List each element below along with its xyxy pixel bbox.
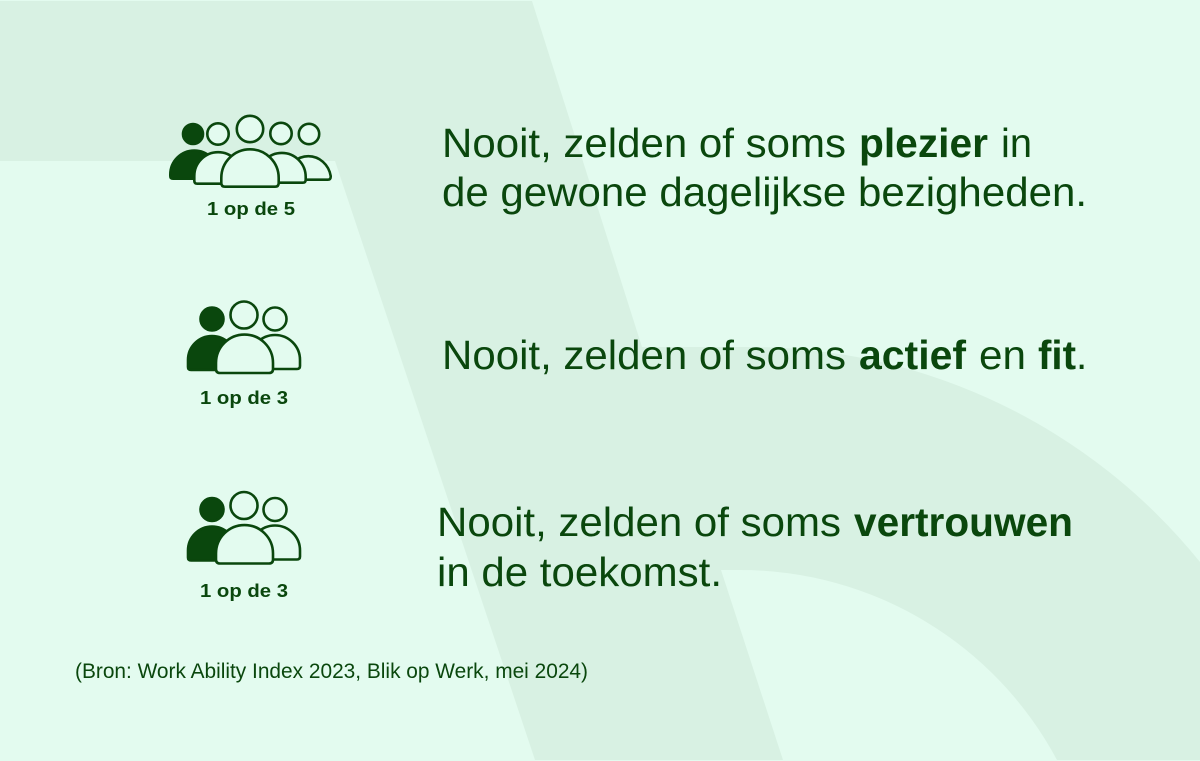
statement: actief en fit: [442, 332, 1087, 378]
statement: plezier: [442, 120, 1087, 215]
icon: group of three people, one highlighted: [188, 492, 300, 564]
icon: group of five people, one highlighted: [170, 116, 331, 187]
label: 1 op de 3: 1 op de 3: [200, 581, 288, 601]
icon: group of three people, one highlighted: [188, 302, 300, 373]
statement: plezier: de gewone dagelijkse bezigheden.: [442, 169, 1087, 215]
source note: (Bron: Work Ability Index 2023, Blik op Werk, mei 2024): [75, 660, 588, 683]
statement: actief en fit: .: [1076, 332, 1087, 378]
row 2: actief en fit: [188, 302, 1087, 408]
statement: plezier: in: [1001, 120, 1032, 166]
statement: actief en fit: actief: [859, 332, 967, 378]
row 3: vertrouwen: [188, 492, 1073, 601]
statement: vertrouwen: [437, 499, 1073, 595]
statement: plezier: Nooit, zelden of soms: [442, 120, 846, 166]
label: 1 op de 3: 1 op de 3: [200, 388, 288, 408]
statement: vertrouwen: vertrouwen: [854, 499, 1073, 545]
statement: vertrouwen: Nooit, zelden of soms: [437, 499, 841, 545]
statement: actief en fit: fit: [1038, 332, 1076, 378]
statement: actief en fit: Nooit, zelden of soms: [442, 332, 846, 378]
statement: actief en fit: en: [979, 332, 1026, 378]
row 1: plezier: [170, 116, 1087, 219]
statement: plezier: plezier: [859, 120, 988, 166]
label: 1 op de 5: 1 op de 5: [207, 199, 295, 219]
statement: vertrouwen: in de toekomst.: [437, 549, 722, 595]
